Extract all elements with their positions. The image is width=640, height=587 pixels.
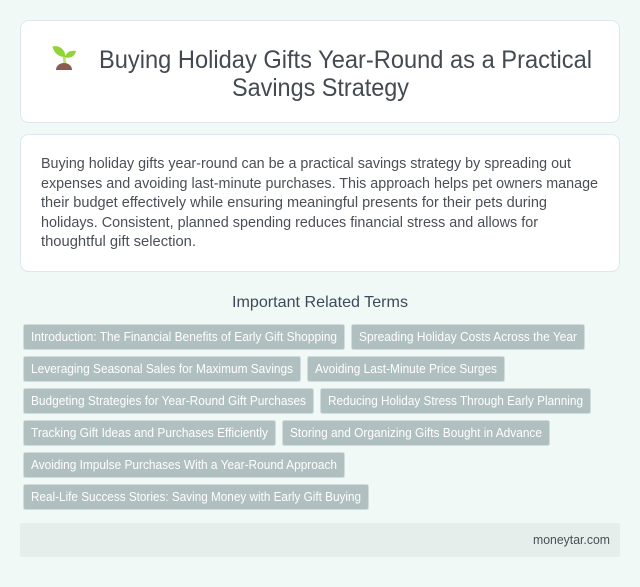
tag (320, 388, 590, 414)
panel: summary text (20, 134, 620, 272)
tag (24, 420, 276, 446)
title (99, 46, 592, 102)
summary paragraph: thoughtful gift selection. (41, 234, 196, 250)
tag: Budgeting Strategies for Year-Round Gift Purchases (31, 394, 306, 408)
tag: Leveraging Seasonal Sales for Maximum Savings (31, 362, 293, 376)
heading: important related terms: Important Related Terms (232, 294, 408, 311)
footer bar (20, 523, 620, 557)
tag (24, 484, 368, 510)
tag: Tracking Gift Ideas and Purchases Efficiently (31, 426, 269, 440)
tag (24, 388, 314, 414)
summary paragraph (41, 156, 598, 250)
summary paragraph: expenses and avoiding last-minute purchases. This approach helps pet owners manage (41, 176, 598, 192)
tag: Reducing Holiday Stress Through Early Planning (328, 394, 583, 408)
title: Buying Holiday Gifts Year-Round as a Practical (99, 46, 592, 74)
tag: Spreading Holiday Costs Across the Year (359, 330, 577, 344)
summary paragraph: Buying holiday gifts year-round can be a practical savings strategy by spreading out (41, 156, 571, 172)
tag: Real-Life Success Stories: Saving Money with Early Gift Buying (31, 490, 361, 504)
icon: seedling (52, 46, 76, 70)
panel: title header (20, 20, 620, 122)
tag (282, 420, 550, 446)
tag: Introduction: The Financial Benefits of Early Gift Shopping (31, 330, 337, 344)
tag (24, 324, 344, 350)
tag (352, 324, 584, 350)
tag (308, 356, 504, 382)
tag (24, 452, 344, 478)
panel: related term tags (24, 324, 590, 510)
summary paragraph: their budget effectively while ensuring meaningful presents for their pets during (41, 195, 547, 211)
tag (24, 356, 300, 382)
title: Savings Strategy (232, 74, 409, 102)
tag: Storing and Organizing Gifts Bought in Advance (290, 426, 542, 440)
tag: Avoiding Impulse Purchases With a Year-Round Approach (31, 458, 337, 472)
summary paragraph: holidays. Consistent, planned spending reduces financial stress and allows for (41, 215, 538, 231)
tag: Avoiding Last-Minute Price Surges (315, 362, 497, 376)
footer source: moneytar.com (533, 533, 610, 547)
